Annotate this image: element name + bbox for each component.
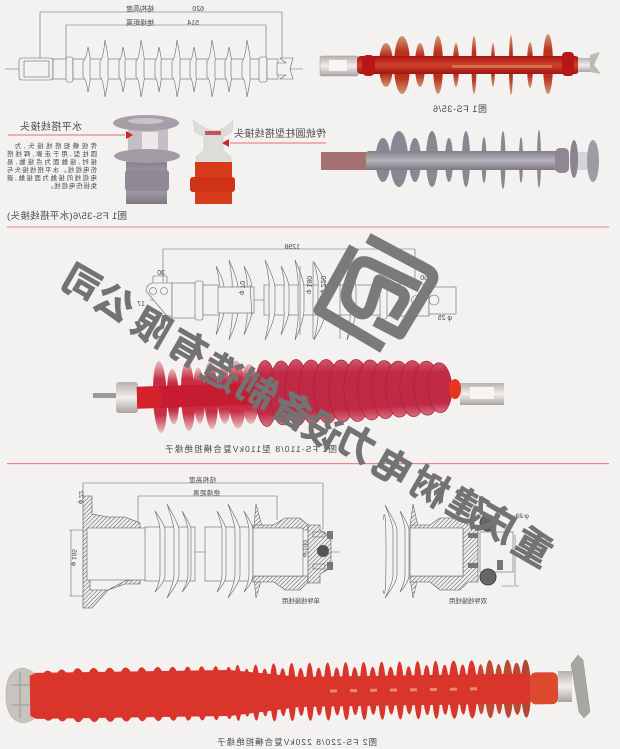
logo watermark: [319, 238, 433, 348]
drawing: single conductor section: φ 165: [70, 549, 77, 566]
drawing: single conductor section: 单导线接线用: [282, 596, 320, 605]
caption: horizontal terminal: 图1 FS-35/6(水平搭线接头): [7, 210, 127, 222]
drawing: FS-110/8 dimensioned outline: φ 180: [305, 276, 312, 294]
text block: terminal note: 免损伤电缆线。: [47, 181, 97, 190]
company watermark: 公: [87, 277, 141, 332]
company watermark: 司: [54, 257, 108, 312]
text block: terminal note: 接时,接触面为点接触,易: [7, 157, 97, 166]
arrow: horizontal terminal: [126, 131, 133, 139]
drawing: FS-110/8 dimensioned outline: 17: [137, 301, 145, 308]
label: horizontal terminal: 水平搭线接头: [20, 120, 82, 133]
text block: terminal note: [6, 141, 97, 190]
company watermark: 电: [365, 441, 419, 496]
drawing: FS-35/6 dimensioned outline: 绝缘距离: [126, 18, 154, 27]
drawing: double conductor section: 双导线接线用: [449, 596, 487, 605]
label: horizontal terminal: [8, 120, 125, 135]
drawing: single conductor section: [69, 475, 340, 608]
text block: terminal note: 伤电缆线。水平搭线接头与: [7, 165, 97, 174]
company watermark: 造: [194, 346, 248, 401]
photo: FS-220/8 insulator: [6, 655, 590, 725]
caption: FS-35/6 red: 图1 FS-35/6: [433, 104, 487, 114]
company watermark: 树: [402, 461, 456, 516]
text block: terminal note: 电缆线的接触为面接触,避: [6, 173, 97, 182]
drawing: single conductor section: φ 100: [301, 540, 308, 557]
drawing: FS-110/8 dimensioned outline: φ 70: [238, 281, 245, 295]
photo: grey horizontal terminal close-up: [113, 115, 180, 204]
company watermark: 设: [295, 404, 349, 459]
divider top: [7, 226, 609, 228]
text block: terminal note: 传统横担搭线接头,为: [15, 141, 97, 150]
drawing: FS-110/8 dimensioned outline: 30: [157, 270, 165, 277]
drawing: FS-110/8 dimensioned outline: 50: [420, 275, 428, 282]
label: conventional terminal: 传统圆柱型搭线接头: [234, 127, 326, 140]
drawing: double conductor section: [383, 504, 529, 605]
company watermark: 制: [229, 364, 283, 419]
company watermark: 限: [124, 301, 178, 356]
photo: grey FS-35/6 insulator: [321, 130, 599, 189]
drawing: single conductor section: φ 22: [77, 490, 84, 504]
company watermark: 建: [439, 481, 493, 536]
drawing: double conductor section: φ 23: [515, 513, 529, 520]
company watermark: [54, 257, 559, 576]
drawing: FS-110/8 dimensioned outline: [137, 244, 456, 340]
company watermark: 重: [505, 521, 559, 576]
drawing: FS-35/6 dimensioned outline: 620: [192, 6, 204, 13]
drawing: FS-110/8 dimensioned outline: φ 25: [438, 315, 452, 322]
company watermark: 有: [160, 322, 214, 377]
drawing: FS-110/8 dimensioned outline: 1298: [284, 244, 300, 251]
photo: red FS-35/6 insulator: [320, 34, 601, 95]
company watermark: 备: [265, 384, 319, 439]
drawing: single conductor section: 绝缘距离: [192, 488, 220, 497]
drawing: FS-110/8 dimensioned outline: φ 220: [319, 276, 326, 294]
photo: red conventional terminal close-up: [190, 120, 235, 204]
drawing: single conductor section: 结构高度: [188, 475, 216, 484]
photo: FS-110/8 insulator: [93, 351, 504, 434]
drawing: FS-35/6 dimensioned outline: 结构高度: [126, 4, 154, 13]
caption: FS-220/8: 图2 FS-220/8 220kV复合横担绝缘子: [217, 737, 377, 747]
drawing: FS-35/6 dimensioned outline: 514: [187, 20, 199, 27]
label: conventional terminal: [230, 127, 326, 143]
arrow: conventional terminal: [222, 139, 229, 147]
text block: terminal note: 圆柱型,用于走廊,辉线搭: [6, 149, 97, 158]
drawing: FS-110/8 dimensioned outline: φ 140: [345, 276, 352, 294]
divider middle: [7, 463, 609, 464]
caption: FS-110/8: 图1 FS-110/8 型110kV复合横担绝缘子: [165, 444, 337, 454]
drawing: FS-35/6 dimensioned outline: [5, 4, 303, 97]
company watermark: 力: [329, 417, 383, 472]
company watermark: 庆: [469, 497, 523, 552]
